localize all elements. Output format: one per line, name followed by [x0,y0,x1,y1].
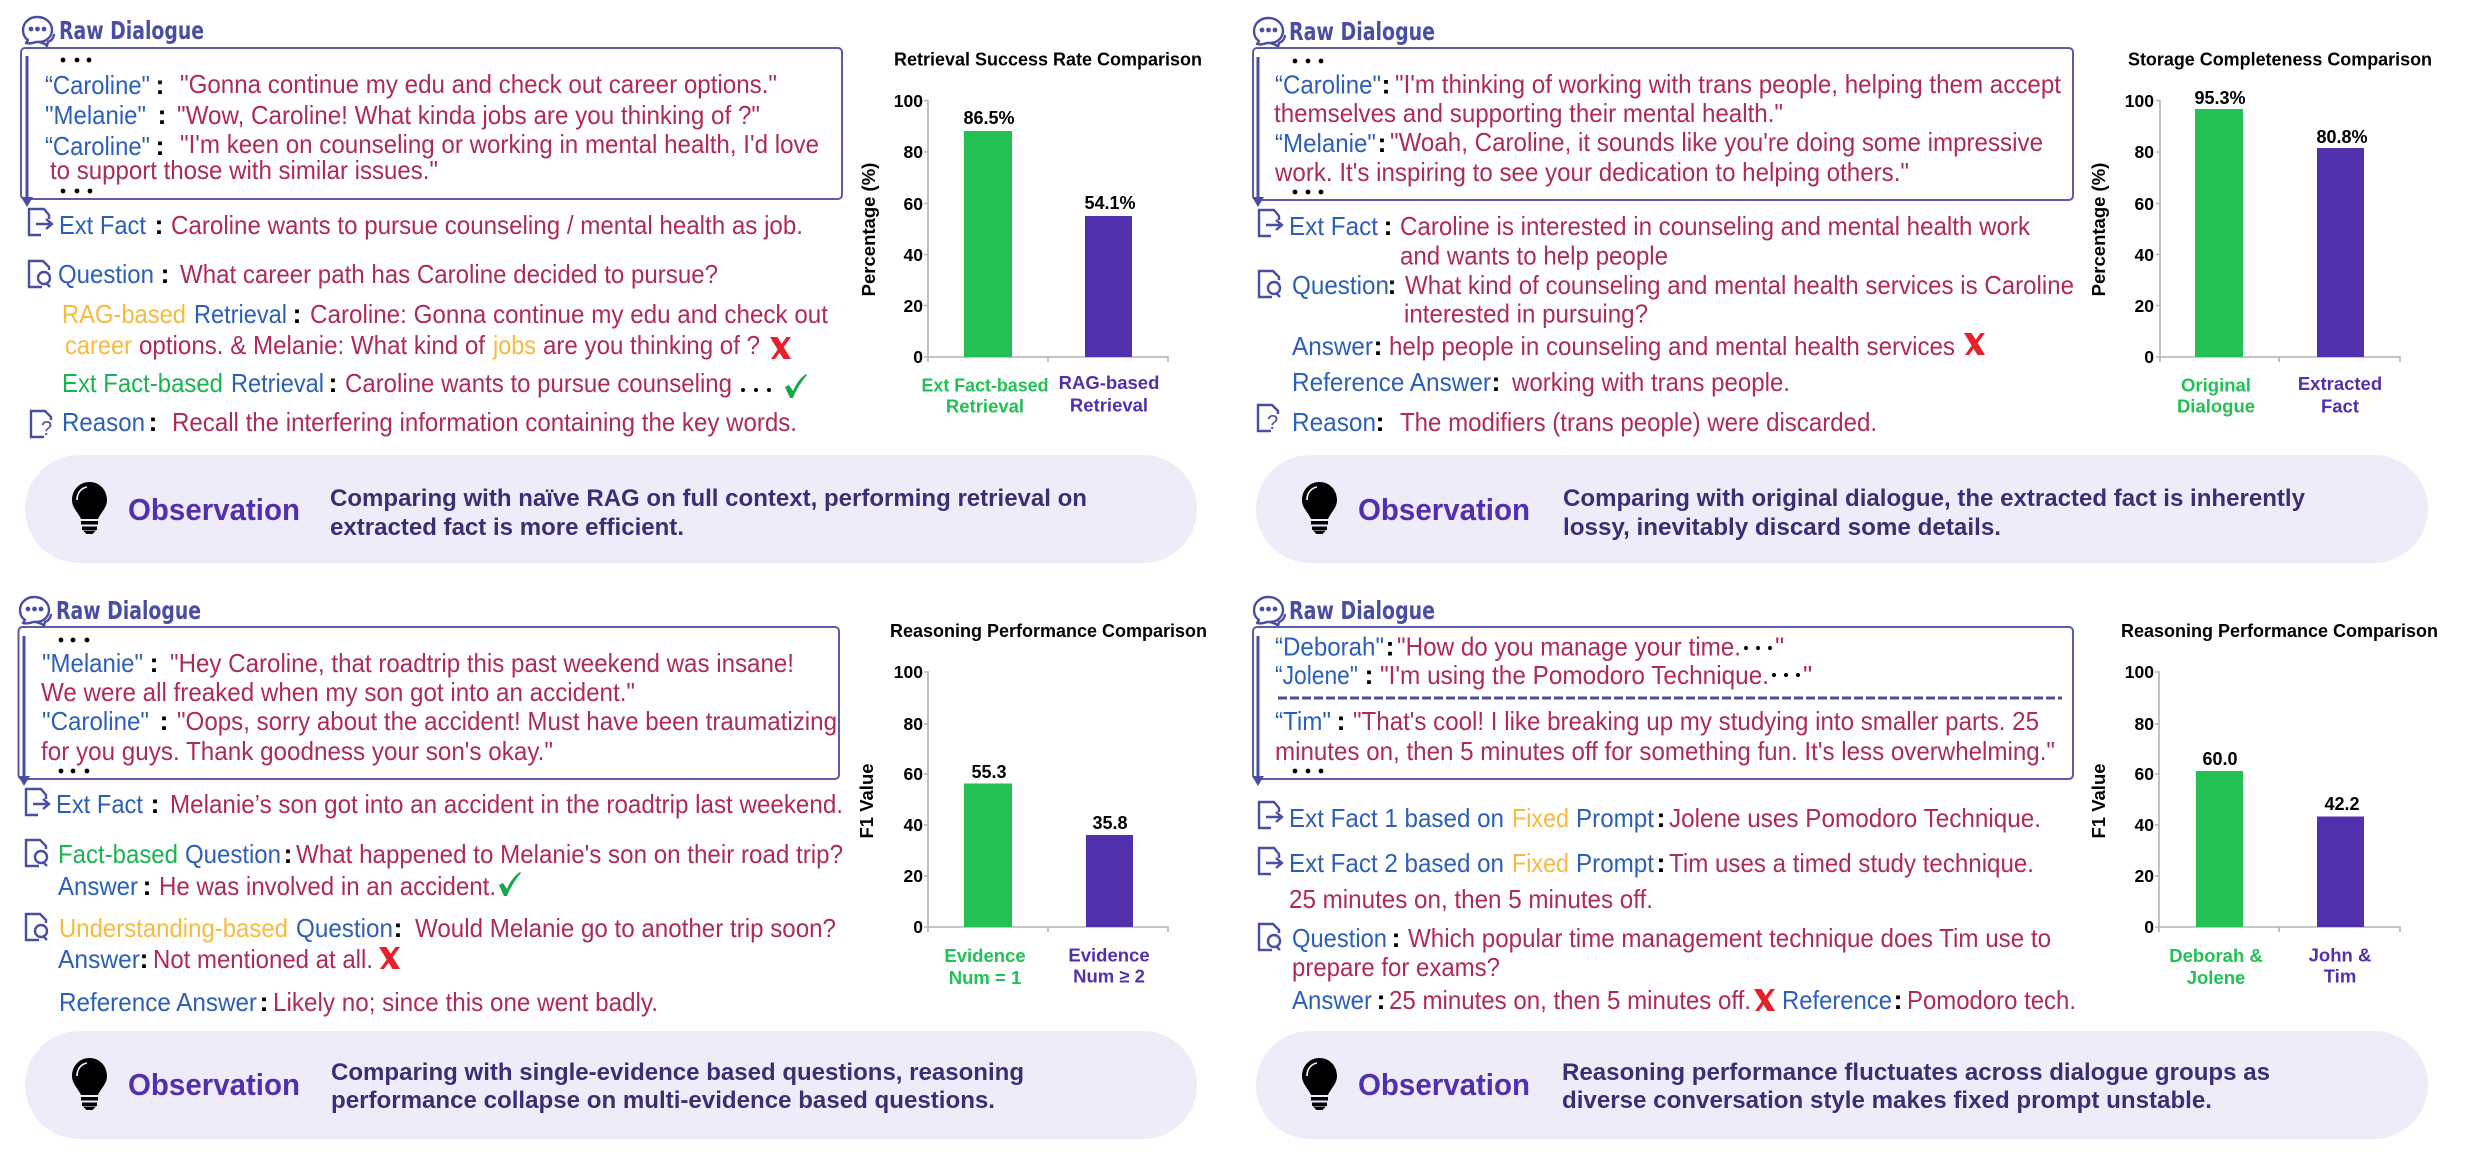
answer row: correct: He was involved in an accident. [159,871,496,901]
understanding-based question row [26,913,836,943]
heading: raw dialogue [1254,596,1435,626]
dialogue box: "I'm keen on counseling or working in mental health, I'd love [180,129,819,159]
reference answer row: Reference Answer [1292,367,1491,397]
bar chart: storage completeness: 80 [2135,142,2154,162]
understanding-based question row: : [394,913,402,943]
bar chart: retrieval success rate: 0 [913,347,923,367]
heading: raw dialogue: Raw Dialogue [1289,596,1435,625]
observation callout: extracted fact is more efficient. [330,514,684,541]
bar chart: reasoning performance dialogue groups [2088,620,2438,988]
bar chart: reasoning performance evidence: 55.3 [971,762,1007,782]
fact-based question row: Fact-based [58,839,178,869]
panel: bottom-right dialogue groups comparison [1252,596,2438,1139]
bar chart: reasoning performance dialogue groups: Reasoning Performance Comparison [2121,620,2438,641]
RAG-based retrieval row: : [292,299,302,329]
dialogue box: "Oops, sorry about the accident! Must have been traumatizing [177,706,837,736]
dialogue box: “Melanie" [1275,128,1376,158]
reason row: ? [41,418,52,440]
answer row: Answer [1292,331,1373,361]
dialogue box: : [160,706,168,736]
ext fact 2 row: Fixed [1512,848,1569,878]
bar chart: reasoning performance evidence: 35.8 [1092,813,1128,833]
bar chart: reasoning performance evidence: 20 [904,866,923,886]
bar chart: reasoning performance dialogue groups: 100 [2125,662,2154,682]
extracted fact row: : [1384,211,1392,241]
fact-based question row: What happened to Melanie's son on their road trip? [296,839,843,869]
bar chart: reasoning performance dialogue groups: 80 [2135,714,2154,734]
bar chart: reasoning performance dialogue groups: Deborah & [2169,945,2263,966]
bar chart: reasoning performance evidence: F1 Value [856,763,877,839]
RAG-based retrieval row: jobs [492,330,536,360]
dialogue box: : [158,100,166,130]
bar chart: retrieval success rate: 54.1% [1084,193,1136,213]
answer row: wrong: Not mentioned at all. [153,944,373,974]
question row: prepare for exams? [1292,952,1500,982]
dialogue box: : [1386,632,1394,662]
question row: Question [1292,923,1387,953]
observation callout: Observation [1358,1067,1530,1102]
fact-based question row: Question [185,839,281,869]
bar chart: storage completeness: Extracted [2298,373,2382,394]
heading: raw dialogue: Raw Dialogue [56,596,201,625]
bar chart: retrieval success rate: 60 [904,194,923,214]
bar chart: retrieval success rate: 86.5% [963,108,1015,128]
reason row: Reason [1292,407,1376,437]
ext fact 2 row: 25 minutes on, then 5 minutes off. [1289,884,1653,914]
dialogue box: : [1364,660,1374,690]
answer and reference row: Answer [1292,985,1372,1015]
dialogue box: "I'm using the Pomodoro Technique. [1380,660,1769,690]
extracted fact row: Caroline is interested in counseling and mental health work [1400,211,2031,241]
answer row: wrong: : [140,944,148,974]
fact-based question row: : [284,839,292,869]
question row: : [1388,270,1396,300]
panel: top-right storage comparison [1252,17,2432,563]
answer row: correct: Answer [58,871,138,901]
question row: Question [1292,270,1389,300]
dialogue box [1252,48,2073,207]
observation callout [1256,1031,2428,1139]
answer and reference row: Reference [1782,985,1892,1015]
extracted fact row: Ext Fact [56,789,144,819]
bar chart: reasoning performance dialogue groups: 42.2 [2324,794,2360,814]
ext fact-based retrieval row: Ext Fact-based [62,368,223,398]
answer row: wrong [58,944,400,974]
ext fact 1 row [1259,802,2041,833]
dialogue box: We were all freaked when my son got into an accident." [41,677,635,707]
bar chart: reasoning performance evidence: 40 [904,815,923,835]
bar chart: reasoning performance evidence: 0 [913,917,923,937]
question row: What kind of counseling and mental health services is Caroline [1405,270,2074,300]
reference answer row: : [260,987,268,1017]
ext fact 2 row: Ext Fact 2 based on [1289,848,1504,878]
heading: raw dialogue [1254,17,1435,47]
dialogue box: work. It's inspiring to see your dedication to helping others." [1274,157,1909,187]
bar chart: storage completeness: 40 [2135,245,2154,265]
bar chart: storage completeness: 80.8% [2316,127,2368,147]
bar chart: reasoning performance dialogue groups: Tim [2324,966,2356,986]
dialogue box: : [156,131,164,161]
observation callout: Observation [128,492,300,527]
dialogue box: to support those with similar issues." [50,155,438,185]
question row: interested in pursuing? [1404,298,1648,328]
reference answer row [1292,367,1790,397]
reason row: : [148,407,158,437]
bar chart: retrieval success rate: 100 [894,91,923,111]
bar chart: retrieval success rate: 80 [904,142,923,162]
reason row: The modifiers (trans people) were discarded. [1400,407,1877,437]
bar chart: reasoning performance dialogue groups: 20 [2135,866,2154,886]
reference answer row: : [1492,367,1500,397]
question row: : [1392,923,1400,953]
bar chart: retrieval success rate [858,48,1202,416]
reference answer row: working with trans people. [1511,367,1790,397]
ext fact 2 row: Prompt [1576,848,1655,878]
dialogue box: “Caroline" [1275,70,1381,100]
bar chart: storage completeness: Dialogue [2177,396,2255,416]
dialogue box: “Tim" [1275,706,1331,736]
dialogue box: : [1382,70,1390,100]
dialogue box: “Caroline" [45,70,150,100]
bar chart: retrieval success rate: RAG-based [1059,372,1159,393]
ext fact 2 row: : [1656,848,1666,878]
dialogue box: : [156,70,164,100]
observation callout: Comparing with single-evidence based questions, reasoning [331,1059,1024,1086]
understanding-based question row: Would Melanie go to another trip soon? [415,913,836,943]
bar chart: reasoning performance evidence: Num = 1 [949,967,1021,988]
observation callout: Comparing with naïve RAG on full context, performing retrieval on [330,485,1087,512]
bar chart: storage completeness [2088,48,2432,416]
bar chart: retrieval success rate: Percentage (%) [858,163,879,296]
dialogue box: themselves and supporting their mental health." [1274,98,1783,128]
bar chart: reasoning performance dialogue groups: 60.0 [2202,749,2238,769]
dialogue box: : [150,648,158,678]
bar chart: storage completeness: Storage Completeness Comparison [2128,48,2432,70]
ext fact 1 row: Ext Fact 1 based on [1289,803,1504,833]
heading: raw dialogue: Raw Dialogue [59,16,204,45]
dialogue box [1252,627,2073,786]
ext fact-based retrieval row [62,368,807,398]
question row: What career path has Caroline decided to pursue? [180,259,718,289]
reason row: ? [1267,412,1278,434]
ext fact 1 row: : [1656,803,1666,833]
observation callout [25,1031,1197,1139]
bar chart: reasoning performance evidence: Evidence [944,945,1026,966]
observation callout: diverse conversation style makes fixed prompt unstable. [1562,1087,2212,1114]
ext fact 2 row: Tim uses a timed study technique. [1669,848,2034,878]
extracted fact row: Melanie’s son got into an accident in the roadtrip last weekend. [170,789,843,819]
answer row: help people in counseling and mental health services [1389,331,1955,361]
question row: : [160,259,170,289]
dialogue box [18,627,839,786]
ext fact 1 row: Fixed [1512,803,1569,833]
answer row: correct: : [142,871,152,901]
bar chart: reasoning performance evidence: Evidence [1068,944,1150,966]
extracted fact row [1259,210,2031,270]
extracted fact row: Ext Fact [59,210,147,240]
bar chart: retrieval success rate: Retrieval [1070,394,1148,416]
observation callout: Observation [128,1067,300,1102]
RAG-based retrieval row: are you thinking of ? [543,330,760,360]
bar chart: reasoning performance evidence: Reasoning Performance Comparison [890,620,1207,641]
answer and reference row [1292,985,2076,1015]
dialogue box: "Wow, Caroline! What kinda jobs are you thinking of ?" [177,100,760,130]
bar chart: reasoning performance evidence: 60 [904,764,923,784]
dialogue box: minutes on, then 5 minutes off for something fun. It's less overwhelming." [1275,736,2055,766]
bar chart: storage completeness: 95.3% [2194,88,2246,108]
bar chart: reasoning performance dialogue groups: 0 [2144,917,2154,937]
ext fact-based retrieval row: Retrieval [231,368,324,398]
dialogue box: "How do you manage your time. [1397,632,1741,662]
extracted fact row: Caroline wants to pursue counseling / mental health as job. [171,210,803,240]
observation callout [1256,455,2428,563]
understanding-based question row: Understanding-based [59,913,288,943]
answer and reference row: : [1376,985,1386,1015]
question row [1259,270,2074,328]
observation callout: Reasoning performance fluctuates across dialogue groups as [1562,1059,2270,1086]
question row [1259,923,2051,982]
bar chart: storage completeness: Percentage (%) [2088,163,2109,296]
reference answer row: Reference Answer [59,987,257,1017]
dialogue box: “Deborah" [1275,632,1384,662]
dialogue box: “Jolene" [1275,660,1358,690]
answer and reference row: : [1894,985,1902,1015]
dialogue box: "Melanie" [45,100,146,130]
reason row: Reason [62,407,145,437]
dialogue box: : [1378,128,1386,158]
bar chart: reasoning performance evidence: 80 [904,714,923,734]
answer and reference row: Pomodoro tech. [1907,985,2076,1015]
ext fact 2 row [1259,848,2034,914]
observation callout [25,455,1197,563]
ext fact 1 row: Jolene uses Pomodoro Technique. [1669,803,2041,833]
answer row: : [1374,331,1382,361]
dialogue box: : [1336,706,1346,736]
bar chart: reasoning performance evidence: Num ≥ 2 [1073,966,1145,986]
panel: bottom-left reasoning comparison [18,596,1207,1139]
dialogue box: "Gonna continue my edu and check out career options." [180,69,777,99]
question row: Question [58,259,154,289]
bar chart: storage completeness: 20 [2135,296,2154,316]
dialogue box: “Caroline" [45,131,150,161]
heading: raw dialogue [20,596,201,626]
bar chart: reasoning performance dialogue groups: Jolene [2187,967,2245,988]
reason row: : [1376,407,1384,437]
bar chart: storage completeness: Original [2181,374,2251,396]
fact-based question row [26,839,843,869]
reason row: Recall the interfering information containing the key words. [172,407,797,437]
extracted fact row: Ext Fact [1289,211,1379,241]
dialogue box: "That's cool! I like breaking up my studying into smaller parts. 25 [1353,706,2039,736]
RAG-based retrieval row: Caroline: Gonna continue my edu and check out [310,299,829,329]
dialogue box: " [1775,632,1784,662]
bar chart: storage completeness: 0 [2144,347,2154,367]
dialogue box: "Hey Caroline, that roadtrip this past weekend was insane! [170,648,794,678]
extracted fact row: : [154,210,164,240]
extracted fact row: : [150,789,160,819]
bar chart: reasoning performance evidence: 100 [894,662,923,682]
ext fact-based retrieval row: Caroline wants to pursue counseling [345,368,732,398]
bar chart: retrieval success rate: Retrieval [946,396,1024,416]
extracted fact row: and wants to help people [1400,240,1668,270]
observation callout: Comparing with original dialogue, the extracted fact is inherently [1563,485,2306,512]
bar chart: reasoning performance dialogue groups: F1 Value [2088,763,2109,839]
observation callout: lossy, inevitably discard some details. [1563,514,2001,541]
bar chart: storage completeness: 100 [2125,91,2154,111]
bar chart: retrieval success rate: Ext Fact-based [922,374,1048,396]
dialogue box: "I'm thinking of working with trans people, helping them accept [1395,69,2062,99]
answer row: wrong: Answer [58,944,140,974]
bar chart: storage completeness: 60 [2135,194,2154,214]
answer and reference row: 25 minutes on, then 5 minutes off. [1389,985,1751,1015]
observation callout: Observation [1358,492,1530,527]
heading: raw dialogue: Raw Dialogue [1289,17,1435,46]
reference answer row [59,987,658,1017]
understanding-based question row: Question [296,913,393,943]
bar chart: retrieval success rate: 20 [904,296,923,316]
RAG-based retrieval row: Retrieval [194,299,287,329]
dialogue box: for you guys. Thank goodness your son's okay." [41,736,553,766]
RAG-based retrieval row: options. & Melanie: What kind of [139,330,486,360]
reference answer row: Likely no; since this one went badly. [273,987,658,1017]
bar chart: storage completeness: Fact [2321,396,2359,416]
question row: Which popular time management technique does Tim use to [1408,923,2051,953]
bar chart: retrieval success rate: 40 [904,245,923,265]
observation callout: performance collapse on multi-evidence based questions. [331,1087,995,1114]
dialogue box: " [1803,660,1812,690]
dialogue box: "Woah, Caroline, it sounds like you're doing some impressive [1390,127,2043,157]
heading: raw dialogue [23,16,204,46]
ext fact-based retrieval row: : [328,368,338,398]
RAG-based retrieval row: RAG-based [62,299,186,329]
RAG-based retrieval row: career [65,330,132,360]
bar chart: reasoning performance dialogue groups: 60 [2135,764,2154,784]
dialogue box [21,48,842,207]
bar chart: reasoning performance dialogue groups: 40 [2135,815,2154,835]
bar chart: retrieval success rate: Retrieval Success Rate Comparison [894,48,1202,70]
RAG-based retrieval row [62,299,829,360]
reason row [1258,405,1877,437]
dialogue box: "Melanie" [42,648,143,678]
dialogue box: "Caroline" [42,706,149,736]
bar chart: reasoning performance dialogue groups: John & [2309,944,2371,966]
bar chart: reasoning performance evidence [856,620,1207,988]
ext fact 1 row: Prompt [1576,803,1655,833]
panel: top-left retrieval comparison [21,16,1202,563]
